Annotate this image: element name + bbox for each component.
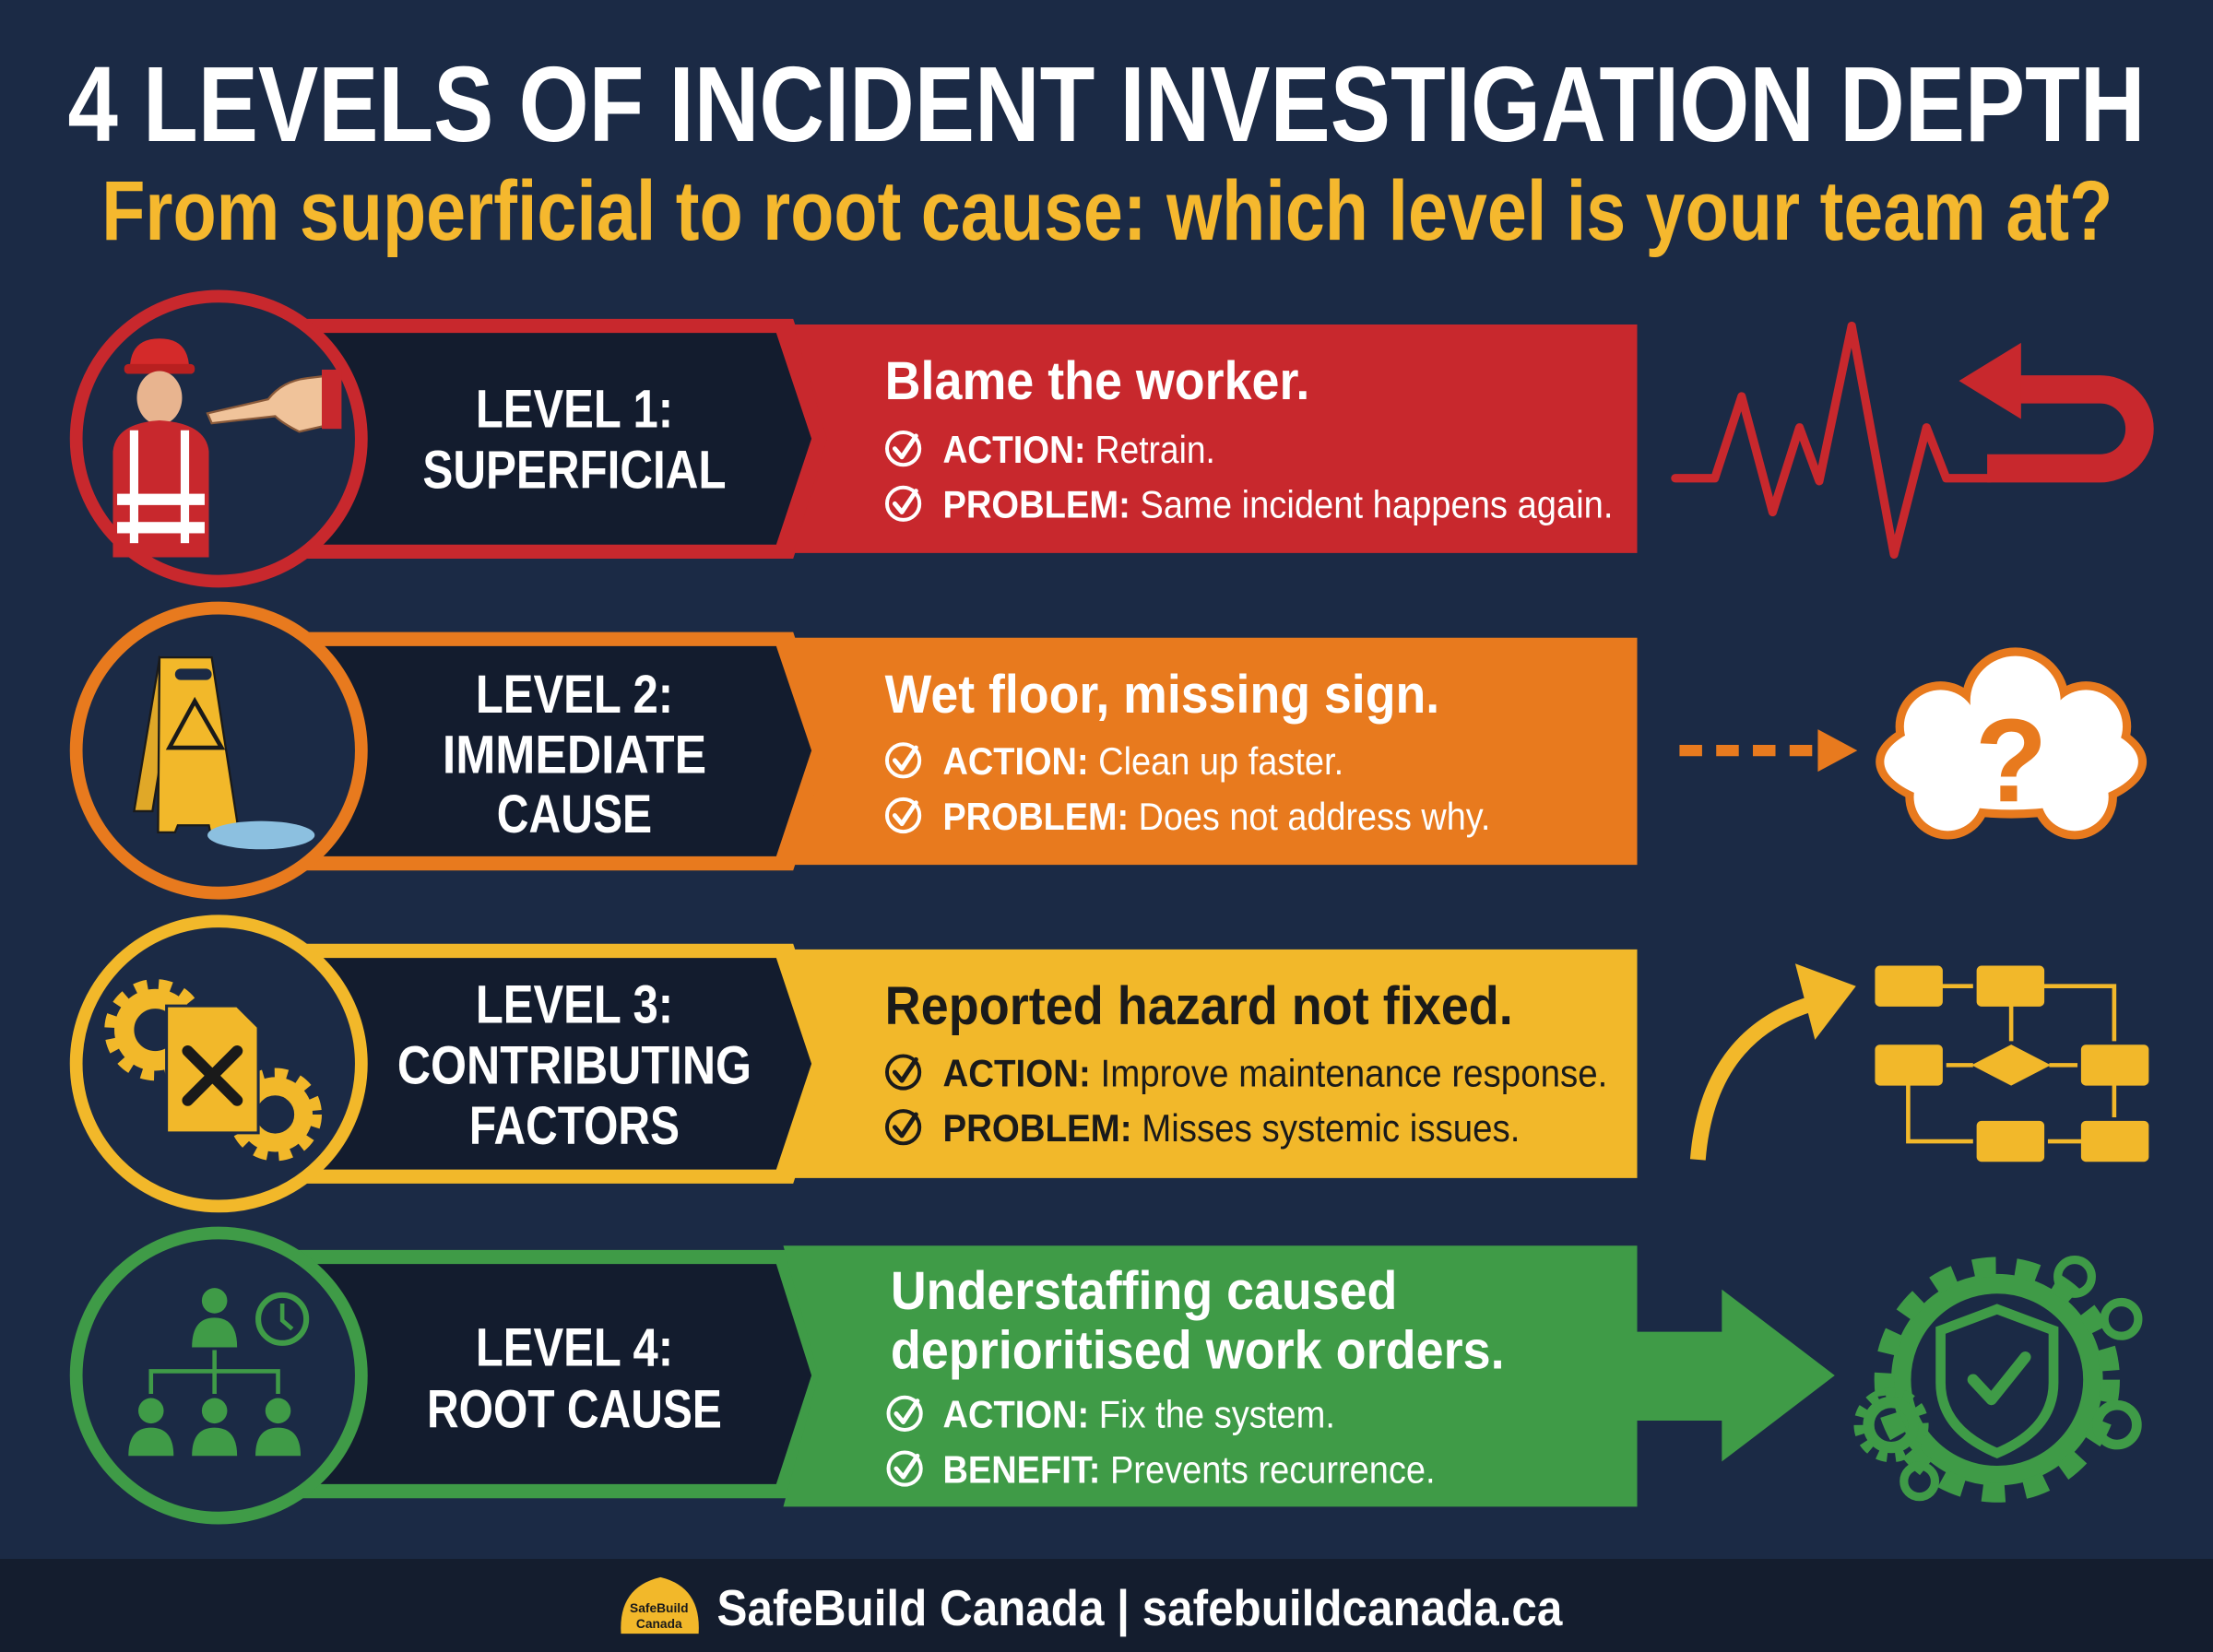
panel: understaffing arrow: BENEFIT: Prevents recurrence. — [942, 1448, 1436, 1491]
label band: level 4 — [282, 1250, 833, 1498]
icon: cloud with question mark — [1876, 647, 2147, 840]
label band: level 2 — [282, 632, 833, 870]
footer text: SafeBuild Canada | safebuildcanada.ca — [717, 1579, 1563, 1637]
label band: level 2: LEVEL 2: — [476, 665, 673, 725]
row 4: root cause — [77, 1233, 2138, 1518]
label band: level 2: IMMEDIATE — [443, 726, 706, 785]
label band: level 3: FACTORS — [469, 1096, 680, 1156]
icon: hard hat logo — [621, 1577, 699, 1634]
label band: level 1 — [282, 319, 833, 559]
row 3: contributing factors — [77, 921, 2148, 1206]
icon: hard hat logo: SafeBuild — [630, 1601, 689, 1615]
label band: level 4: LEVEL 4: — [476, 1317, 673, 1377]
panel: wet floor, missing sign — [793, 638, 1638, 865]
arrow: dashed — [1679, 729, 1857, 772]
icon: wet floor sign — [77, 608, 361, 893]
icon: gears with shield — [1859, 1260, 2138, 1497]
panel: blame the worker: Blame the worker. — [885, 351, 1309, 411]
label band: level 3: CONTRIBUTING — [397, 1035, 751, 1095]
row 2: immediate cause — [77, 608, 2147, 893]
panel: understaffing arrow: Understaffing caused — [891, 1261, 1397, 1321]
label band: level 3 — [282, 944, 833, 1184]
footer — [0, 1559, 2213, 1652]
icon: hard hat logo: Canada — [636, 1617, 682, 1631]
panel: understaffing arrow: ACTION: Fix the system. — [942, 1394, 1335, 1436]
icon: org chart with clock — [77, 1233, 361, 1518]
panel: wet floor, missing sign: ACTION: Clean up faster. — [942, 740, 1343, 783]
icon: worker being blamed — [77, 296, 361, 581]
icon: flowchart — [1876, 966, 2148, 1161]
panel: reported hazard not fixed — [793, 950, 1638, 1178]
panel: understaffing arrow: deprioritised work orders. — [891, 1320, 1505, 1380]
panel: reported hazard not fixed: ACTION: Improve maintenance response. — [942, 1052, 1607, 1094]
label band: level 2: CAUSE — [497, 785, 652, 844]
panel: blame the worker — [793, 324, 1638, 553]
icon: ecg line with u-turn arrow — [1675, 326, 2139, 554]
icon: cloud with question mark: ? — [1975, 695, 2047, 827]
panel: blame the worker: PROBLEM: Same incident happens again. — [942, 484, 1613, 526]
panel: wet floor, missing sign: Wet floor, missing sign. — [885, 665, 1439, 725]
label band: level 1: SUPERFICIAL — [422, 440, 727, 500]
panel: wet floor, missing sign: PROBLEM: Does not address why. — [942, 796, 1490, 838]
panel: reported hazard not fixed: Reported hazard not fixed. — [885, 976, 1513, 1036]
icon: gears and failed document — [77, 921, 361, 1206]
label band: level 3: LEVEL 3: — [476, 974, 673, 1034]
panel: understaffing arrow — [783, 1245, 1835, 1506]
label band: level 4: ROOT CAUSE — [427, 1380, 722, 1440]
panel: blame the worker: ACTION: Retrain. — [942, 429, 1215, 471]
arrow: curved — [1698, 963, 1856, 1160]
row 1: superficial — [77, 296, 2139, 581]
label band: level 1: LEVEL 1: — [476, 380, 673, 440]
panel: reported hazard not fixed: PROBLEM: Misses systemic issues. — [942, 1107, 1520, 1150]
